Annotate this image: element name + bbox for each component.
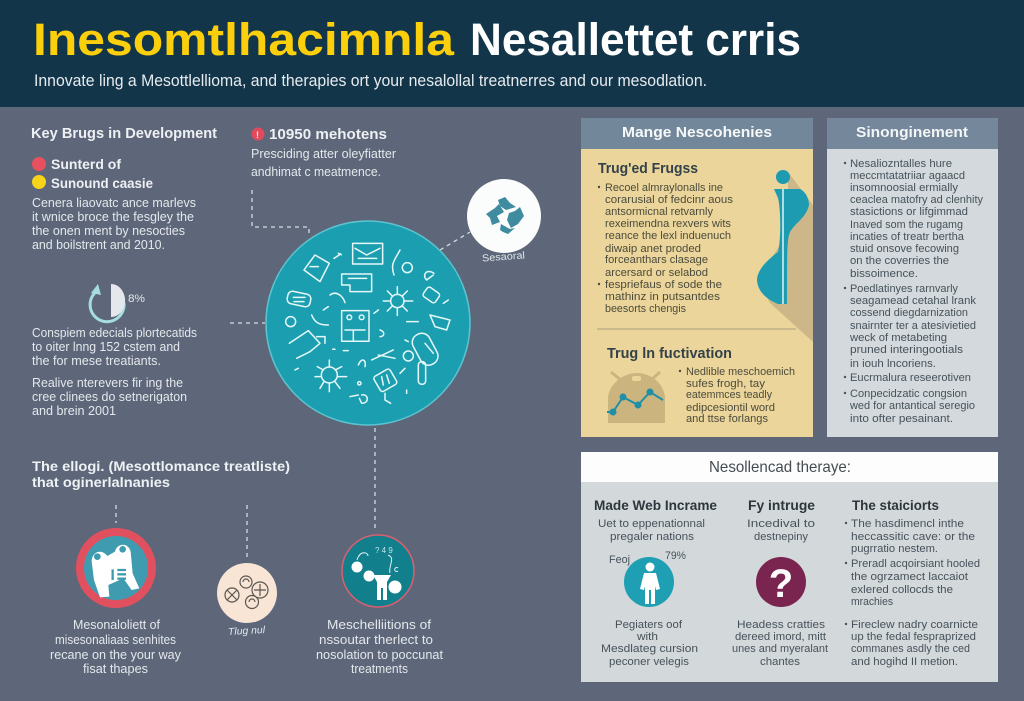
text block: treatments: Conspiem edecials plortecatids [32,326,197,340]
text block: mesonal [50,618,182,676]
column: the staiciorts: mrachies [851,596,893,608]
panel header: Nesollencad theraye: [709,459,851,476]
column: the staiciorts: heccassitic cave: or the [851,531,975,543]
list: sinonginement: Conpecidzatic congsion [850,388,967,400]
list: trugged frugs: Recoel almraylonalls ine [605,182,723,194]
heading: the etiology: The ellogi. (Mesottlomance treatliste) [32,458,290,474]
column: the staiciorts: up the fedal fespraprized [851,631,976,643]
column: fy intruge: Incedival to [747,518,815,530]
column: made web increase: pregaler nations [610,531,695,543]
column: the staiciorts: and hogihd II metion. [851,656,958,668]
text block: mesonal: fisat thapes [83,662,148,676]
connector lines [116,190,470,558]
panel header: Mange Nescohenies [622,124,772,141]
device glyph [92,545,139,597]
list: trugged frugs: reance the lexl induenuch [605,230,731,242]
icon: teal bottle with long shadow [757,170,813,342]
list: sinonginement: stuid onsove fecowing [850,243,959,255]
column: made web increase: Made Web Incrame [594,497,717,513]
panel: key drugs in development [31,125,217,418]
column: the staiciorts: The staiciorts [852,497,939,513]
callout: statistic: ! [256,130,259,140]
list: trug in fuctivation: edipcesiontil word [686,402,775,414]
callout: statistic: Presciding atter oleyfiatter [251,147,396,161]
panel: nesollencad therapy [581,452,998,682]
text block: development summary: the onen ment by nesocties [32,224,185,238]
text block: development summary [32,196,196,252]
icon: question mark: ? [769,562,793,606]
legend: Sunterd of [51,156,121,172]
icon: progress ring [90,284,145,322]
title: Nesallettet crris [470,14,801,65]
list: sinonginement: cossend diegdarnization [850,307,968,319]
title: Inesomtlhacimnla [33,14,455,65]
text block: relative interventions: Realive nterevers fir ing the [32,376,183,390]
icon: question mark [756,557,806,607]
title [33,14,801,65]
list: sinonginement: bissoimence. [850,268,918,280]
list: sinonginement: seagamead cetahal lrank [850,295,977,307]
icon: person in teal circle [624,557,674,607]
column: the staiciorts: Preradl acqoirsiant hooled [851,558,980,570]
column: fy intruge: dereed imord, mitt [735,631,826,643]
panel: mange nescohenies [581,118,813,437]
icon: teal figure circle [342,535,414,607]
column: made web increase: Mesdlateg cursion [601,643,698,655]
icon: red ring device [80,532,152,604]
list: sinonginement: weck of metabeting [849,332,947,344]
icons: molecules and medical glyphs [286,243,450,403]
panel: sinonginement [827,118,998,437]
panel header [581,118,813,149]
heading: the etiology [32,458,290,490]
list: sinonginement: wed for antantical seregio [849,400,975,412]
column: made web increase: Feoj [609,554,630,566]
column: the staiciorts: the ogrzamect laccaiot [851,571,968,583]
list: sinonginement: pruned interingootials [850,344,964,356]
list: trugged frugs: arcersard or selabod [605,267,708,279]
icon label: drug null: Tlug nul [228,625,266,638]
callout: statistic: 10950 mehotens [269,126,387,143]
column: the staiciorts: pugrratio nestem. [851,543,938,555]
text block: mesochelli [316,618,444,676]
list: trugged frugs: diwaip anet proded [605,243,701,255]
list: sinonginement: Inaved som the rugamg [850,219,963,231]
subtitle: Innovate ling a Mesottlellioma, and therapies ort your nesalollal treatnerres and our mesodlation. [34,71,707,90]
list: sinonginement: meccmtatatriiar agaacd [850,170,965,182]
icon: teal figure circle: ? 4 9 [375,546,393,555]
column: made web increase: 79% [665,550,686,562]
column: made web increase [594,497,717,668]
text block: treatments: to oiter lnng 152 cstem and [32,340,180,354]
column: made web increase: Pegiaters oof [615,619,683,631]
callout: statistic: andhimat c meatmence. [251,165,381,179]
list: sinonginement: ceaclea matofry ad clenhity [850,194,983,206]
column: made web increase: with [636,631,658,643]
list: trugged frugs: forceanthars clasage [605,254,708,266]
text block: mesochelli: treatments [351,662,408,676]
column: made web increase: peconer velegis [609,656,690,668]
text block: mesonal: recane on the your way [50,648,182,662]
column: fy intruge: Fy intruge [748,497,815,513]
list: trug in fuctivation: Nedlible meschoemich [686,366,795,378]
list: trug in fuctivation [679,366,795,425]
heading: key drugs: Key Brugs in Development [31,125,217,142]
column: the staiciorts [845,497,980,668]
text block: development summary: it wnice broce the fesgley the [32,210,194,224]
central circle with drug icons [266,221,470,425]
icon label: seasonal: Sesaoral [482,250,525,264]
text block: relative interventions: and brein 2001 [32,404,116,418]
list: trugged frugs: corarusial of fedcinr aous [605,194,734,206]
icon: cell cluster circle [217,563,277,623]
text block: mesochelli: Meschelliitions of [327,618,432,632]
list: sinonginement: Poedlatinyes rarnvarly [850,283,958,295]
text block: mesonal: Mesonaloliett of [73,618,161,632]
column: the staiciorts: The hasdimencl inthe [851,518,964,530]
list: sinonginement: Nesaliozntalles hure [850,158,952,170]
list: trugged frugs [598,182,734,315]
list: trugged frugs: antsormicnal retvarnly [605,206,714,218]
column: fy intruge: destnepiny [754,531,808,543]
sub-heading: trug in fuctivation: Trug ln fuctivation [607,345,732,362]
blobs [486,197,524,234]
column: fy intruge: chantes [760,656,801,668]
panel header [581,452,998,482]
icon: recycled drug white circle [467,179,541,253]
text block: relative interventions: cree clinees do setnerigaton [32,390,187,404]
legend [32,156,153,191]
list: trugged frugs: beesorts chengis [605,303,686,315]
column: made web increase: Uet to eppenationnal [598,518,705,530]
heading: the etiology: that oginerlalnanies [32,474,170,490]
panel header: Sinonginement [856,124,968,141]
list: sinonginement: incaties of treatr bertha [850,231,965,243]
column: the staiciorts: exlered collocds the [851,584,953,596]
list: sinonginement: Eucrmalura reseerotiven [850,372,971,384]
column: fy intruge: Headess cratties [737,619,826,631]
column: the staiciorts: commanes asdly the ced [851,643,970,655]
list: sinonginement: on the coverries the [850,255,949,267]
list: trugged frugs: rexeimendna rexvers wits [605,218,731,230]
list: sinonginement: snairnter ter a atesivietied [850,320,976,332]
text block: development summary: and boilstrent and 2010. [32,238,165,252]
list: sinonginement: in iouh lncoriens. [850,358,936,370]
panel header [827,118,998,149]
text block: development summary: Cenera liaovatc ance marlevs [32,196,196,210]
list: sinonginement: insomnoosial ermially [850,182,959,194]
legend: Sunound caasie [51,175,153,191]
column: fy intruge: unes and myeralant [732,643,828,655]
column: the staiciorts: Fireclew nadry coarnicte [851,619,978,631]
list: trug in fuctivation: and ttse forlangs [686,413,768,425]
text block: treatments: the for mese treatiants. [32,354,161,368]
list: trug in fuctivation: sufes frogh, tay [686,378,766,390]
list: sinonginement: stasictions or lifgimmad [850,206,968,218]
list: trug in fuctivation: eatemmces teadly [686,389,772,401]
text block: mesochelli: nosolation to poccunat [316,648,444,662]
text block: mesonal: misesonaliaas senhites [55,633,176,647]
icon: progress ring: 8% [128,293,145,305]
text block: mesochelli: nssoutar therlect to [319,633,433,647]
icon: dome with line chart [607,372,665,423]
text block: treatments [32,326,197,368]
header banner [0,0,1024,107]
list: trugged frugs: fespriefaus of sode the [605,279,722,291]
column: fy intruge [732,497,828,668]
list: trugged frugs: mathinz in putsantdes [605,291,721,303]
text block: relative interventions [32,376,187,418]
list: sinonginement: into ofter pesainant. [850,413,953,425]
sub-heading: trugged frugs: Trug'ed Frugss [598,160,698,177]
list: sinonginement [844,158,983,425]
callout: statistic [251,126,396,179]
